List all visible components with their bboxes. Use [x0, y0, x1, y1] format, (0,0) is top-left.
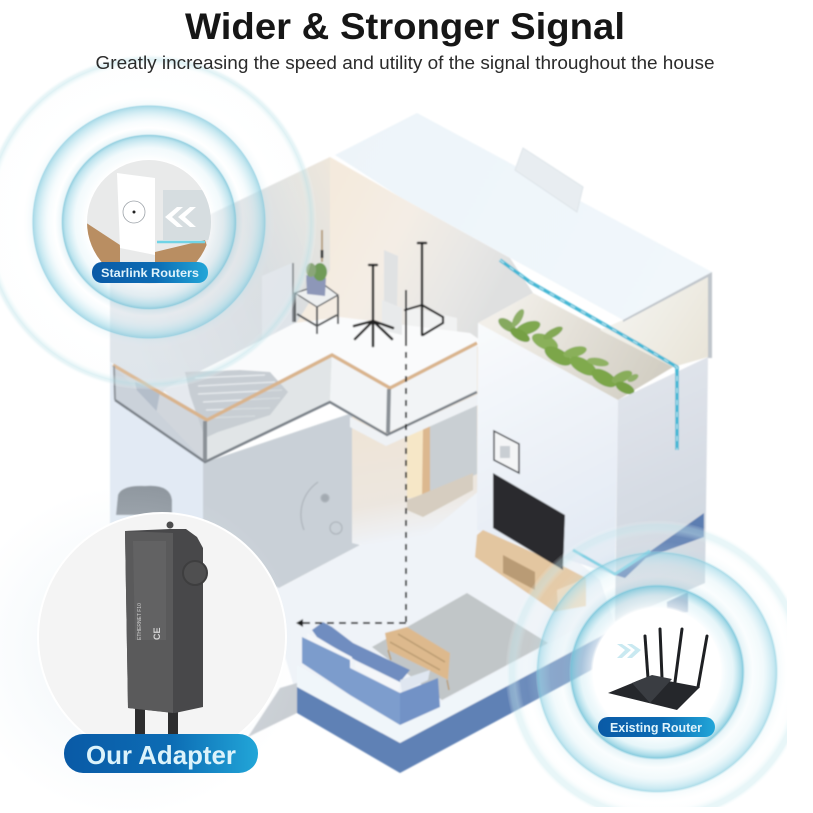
adapter white circle [38, 513, 286, 761]
upper back wall [295, 157, 533, 340]
router label text: Existing Router [610, 721, 702, 735]
chevrons [165, 207, 196, 227]
wall soft marks [301, 482, 342, 534]
signal cable highlight [500, 260, 677, 450]
Our Adapter text: Our Adapter [86, 740, 236, 770]
soft bottom-left backdrop [0, 485, 300, 813]
antennas [645, 629, 707, 687]
signal chevrons [617, 644, 641, 658]
TV [493, 473, 565, 570]
existing router [598, 629, 715, 737]
TV stand [475, 530, 586, 612]
Starlink router photo [85, 158, 215, 286]
arrow head [296, 619, 303, 627]
cables [135, 708, 178, 738]
dashed horizontal path [302, 622, 406, 624]
cyan glow line [157, 241, 205, 243]
grey wall wedge [248, 683, 297, 737]
balcony wood rail [113, 343, 477, 420]
side table [295, 230, 338, 334]
coffee table [385, 627, 450, 690]
ground floor back wall [352, 345, 480, 545]
black stand two [405, 243, 443, 335]
left signal rings [0, 54, 317, 390]
label text: Starlink Routers [101, 266, 199, 280]
roof panel antenna [515, 148, 583, 212]
screw [183, 561, 207, 585]
roof side edge [623, 272, 712, 358]
router label pill [598, 717, 715, 737]
adapter device: CE [152, 627, 162, 640]
bed [135, 370, 288, 438]
adapter device [125, 522, 207, 738]
subtitle: Greatly increasing the speed and utility of the signal throughout the house [96, 53, 714, 73]
ground floor [203, 480, 615, 745]
small grey bag [116, 486, 172, 515]
roof [335, 113, 712, 320]
balcony glass panels [113, 343, 478, 461]
balcony posts [114, 366, 389, 461]
right opening [600, 277, 708, 367]
signal path blue cable lower [573, 550, 650, 574]
balcony frame bottom [115, 392, 477, 462]
black stand one [354, 265, 393, 346]
signal path blue cable upper [500, 260, 677, 450]
sofa [302, 622, 440, 725]
left outer wall [110, 362, 205, 545]
upper left wall [110, 157, 335, 392]
carpet [372, 593, 548, 700]
ground floor room [407, 395, 477, 517]
left block wall [203, 413, 360, 588]
right block front face [477, 323, 618, 575]
door frame [262, 263, 293, 340]
dashed vertical path [405, 340, 407, 623]
upper floor [163, 317, 480, 420]
side blue band [615, 513, 704, 578]
right signal rings [506, 524, 787, 807]
right block side face [615, 357, 708, 622]
router body [608, 677, 700, 710]
floor slab [297, 612, 610, 743]
router panel [117, 173, 155, 255]
front base strip [667, 592, 688, 616]
title: Wider & Stronger Signal [185, 6, 625, 47]
adapter label [133, 541, 166, 640]
pale wall box [405, 306, 457, 340]
nub [166, 522, 174, 528]
picture frame [494, 431, 519, 473]
shelf unit [382, 250, 402, 335]
blue plinth [297, 633, 607, 773]
right block planter [478, 293, 673, 400]
label pill [92, 262, 208, 283]
plants [496, 307, 640, 397]
adapter device: ETHERNET F10 [137, 603, 143, 640]
house cutaway illustration [110, 113, 712, 773]
dashed path upper solid [405, 290, 407, 340]
Our Adapter pill [64, 734, 258, 773]
